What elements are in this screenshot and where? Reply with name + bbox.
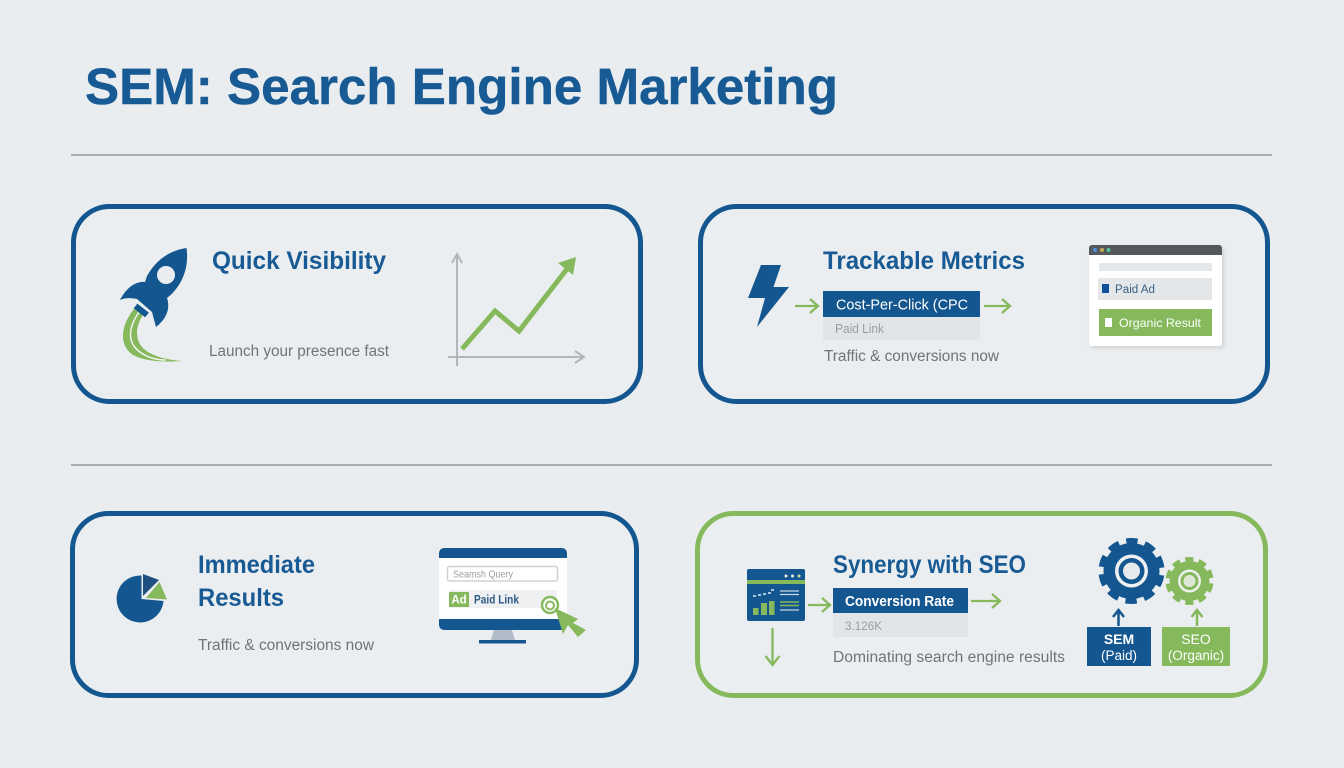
heading: synergy with seo: Synergy with SEO (833, 551, 1026, 579)
browser window: search results: Organic Result (1119, 316, 1202, 330)
arrow: seo to gear (1192, 610, 1202, 626)
box: seo organic: SEO (1181, 631, 1211, 647)
panel: quick visibility (74, 206, 640, 402)
heading: immediate results: Results (198, 584, 284, 612)
metric box: cost per click: Cost-Per-Click (CPC (836, 298, 968, 314)
icon: analytics dashboard (747, 569, 805, 621)
heading: trackable metrics: Trackable Metrics (823, 247, 1025, 275)
icon: pie chart (117, 574, 167, 622)
text: launch your presence fast: Launch your presence fast (209, 343, 390, 360)
heading: quick visibility: Quick Visibility (212, 247, 386, 275)
arrow: sem to gear (1113, 610, 1124, 626)
icon: green gear (1165, 557, 1214, 605)
arrow (808, 598, 830, 612)
metric box: cost per click: Paid Link (835, 322, 885, 336)
heading: immediate results (198, 551, 315, 612)
icon: blue gear (1098, 538, 1165, 604)
browser window: search results: Paid Ad (1115, 284, 1155, 296)
arrow: down (766, 628, 780, 665)
text: dominating search engine results: Dominating search engine results (833, 649, 1065, 666)
metric box: conversion rate: 3.126K (845, 619, 882, 633)
panel: trackable metrics (700, 206, 1268, 402)
metric box: conversion rate (833, 588, 968, 637)
icon: rocket (120, 248, 187, 361)
monitor: search results with click: Seamsh Query (453, 568, 514, 580)
title: SEM: Search Engine Marketing (85, 58, 838, 115)
chart: rising line (448, 254, 584, 366)
box: seo organic (1162, 627, 1230, 666)
text: traffic and conversions: Traffic & conversions now (824, 348, 1000, 365)
arrow (795, 299, 818, 313)
monitor: search results with click: Paid Link (474, 594, 520, 606)
metric box: conversion rate: Conversion Rate (845, 594, 954, 610)
box: sem paid: SEM (1104, 631, 1134, 647)
box: sem paid (1087, 627, 1151, 666)
text: traffic and conversions: Traffic & conversions now (198, 637, 375, 654)
arrow (984, 299, 1010, 313)
panel: synergy with seo (698, 514, 1266, 696)
browser window: search results (1089, 245, 1222, 346)
box: sem paid: (Paid) (1101, 648, 1137, 663)
monitor: search results with click: Ad (451, 594, 467, 606)
box: seo organic: (Organic) (1168, 648, 1224, 663)
icon: click target and cursor (542, 597, 586, 637)
arrow (971, 594, 1000, 608)
icon: lightning bolt (748, 265, 789, 327)
monitor: search results with click (439, 548, 586, 644)
metric box: cost per click (823, 291, 980, 340)
panel: immediate results (72, 514, 636, 696)
heading: immediate results: Immediate (198, 551, 315, 579)
